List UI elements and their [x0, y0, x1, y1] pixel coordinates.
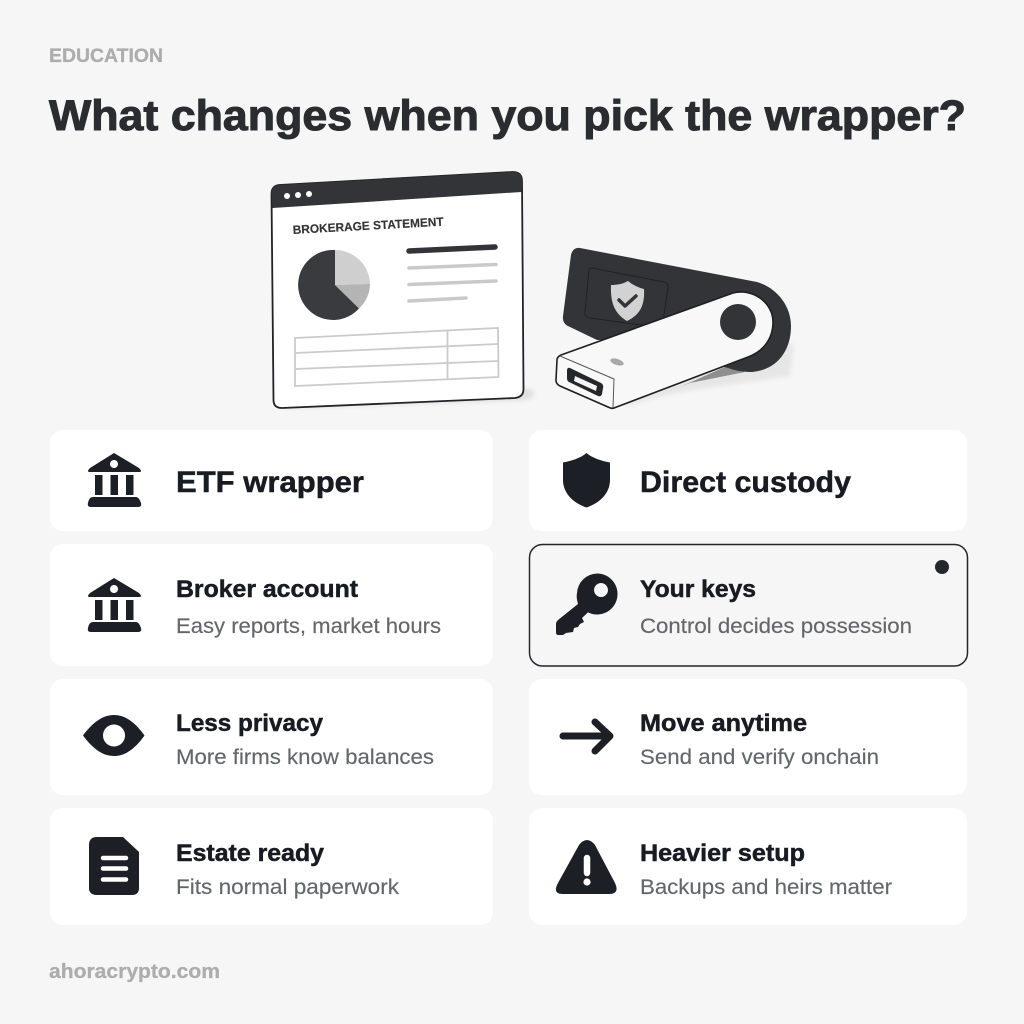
panel: ETF wrapper [50, 430, 493, 531]
panel: Your keys (highlighted) [530, 544, 968, 666]
illustration: hardware wallet [556, 248, 794, 408]
description: Fits normal paperwork [176, 876, 400, 899]
icon: bank [88, 453, 141, 507]
icon: eye [83, 715, 144, 756]
icon: arrow [563, 722, 610, 751]
heading: Heavier setup [640, 840, 805, 867]
heading: ETF wrapper [176, 466, 364, 499]
heading: Your keys [640, 576, 756, 603]
heading: Direct custody [640, 466, 851, 499]
statement heading: BROKERAGE STATEMENT [292, 215, 445, 237]
footer source: ahoracrypto.com [49, 961, 220, 983]
description: Send and verify onchain [640, 746, 879, 769]
window dots [284, 191, 312, 199]
text lines [409, 247, 496, 301]
description: More firms know balances [176, 746, 434, 769]
wallet button [720, 304, 756, 340]
eyebrow label: EDUCATION [49, 46, 163, 67]
panel: Heavier setup [529, 808, 967, 925]
icon: document [89, 837, 139, 895]
statement header bar [272, 172, 522, 208]
icon: bank [88, 578, 141, 632]
heading: Estate ready [176, 840, 325, 867]
illustration: brokerage statement [272, 172, 534, 408]
wallet white body [556, 292, 773, 408]
statement table [295, 328, 498, 386]
description: Control decides possession [640, 615, 912, 638]
panel: Move anytime [529, 679, 967, 795]
icon: warning triangle [556, 840, 617, 894]
heading: Broker account [176, 576, 358, 603]
shield check icon [611, 281, 644, 321]
icon: key [556, 574, 618, 635]
icon: shield [563, 453, 610, 508]
status dot [935, 560, 949, 574]
panel: Direct custody [529, 430, 967, 531]
panel: Estate ready [50, 808, 493, 925]
wallet dark swivel cover [563, 248, 791, 372]
shield badge plate [585, 268, 668, 328]
description: Easy reports, market hours [176, 615, 441, 638]
panel: Less privacy [50, 679, 493, 795]
wallet front edge [560, 356, 614, 408]
heading: Move anytime [640, 710, 807, 737]
description: Backups and heirs matter [640, 876, 892, 899]
usb port [567, 368, 603, 396]
title: What changes when you pick the wrapper? [49, 92, 966, 140]
pie chart [298, 250, 370, 320]
panel: Broker account [50, 544, 493, 666]
wallet status light [609, 357, 625, 367]
heading: Less privacy [176, 710, 324, 737]
